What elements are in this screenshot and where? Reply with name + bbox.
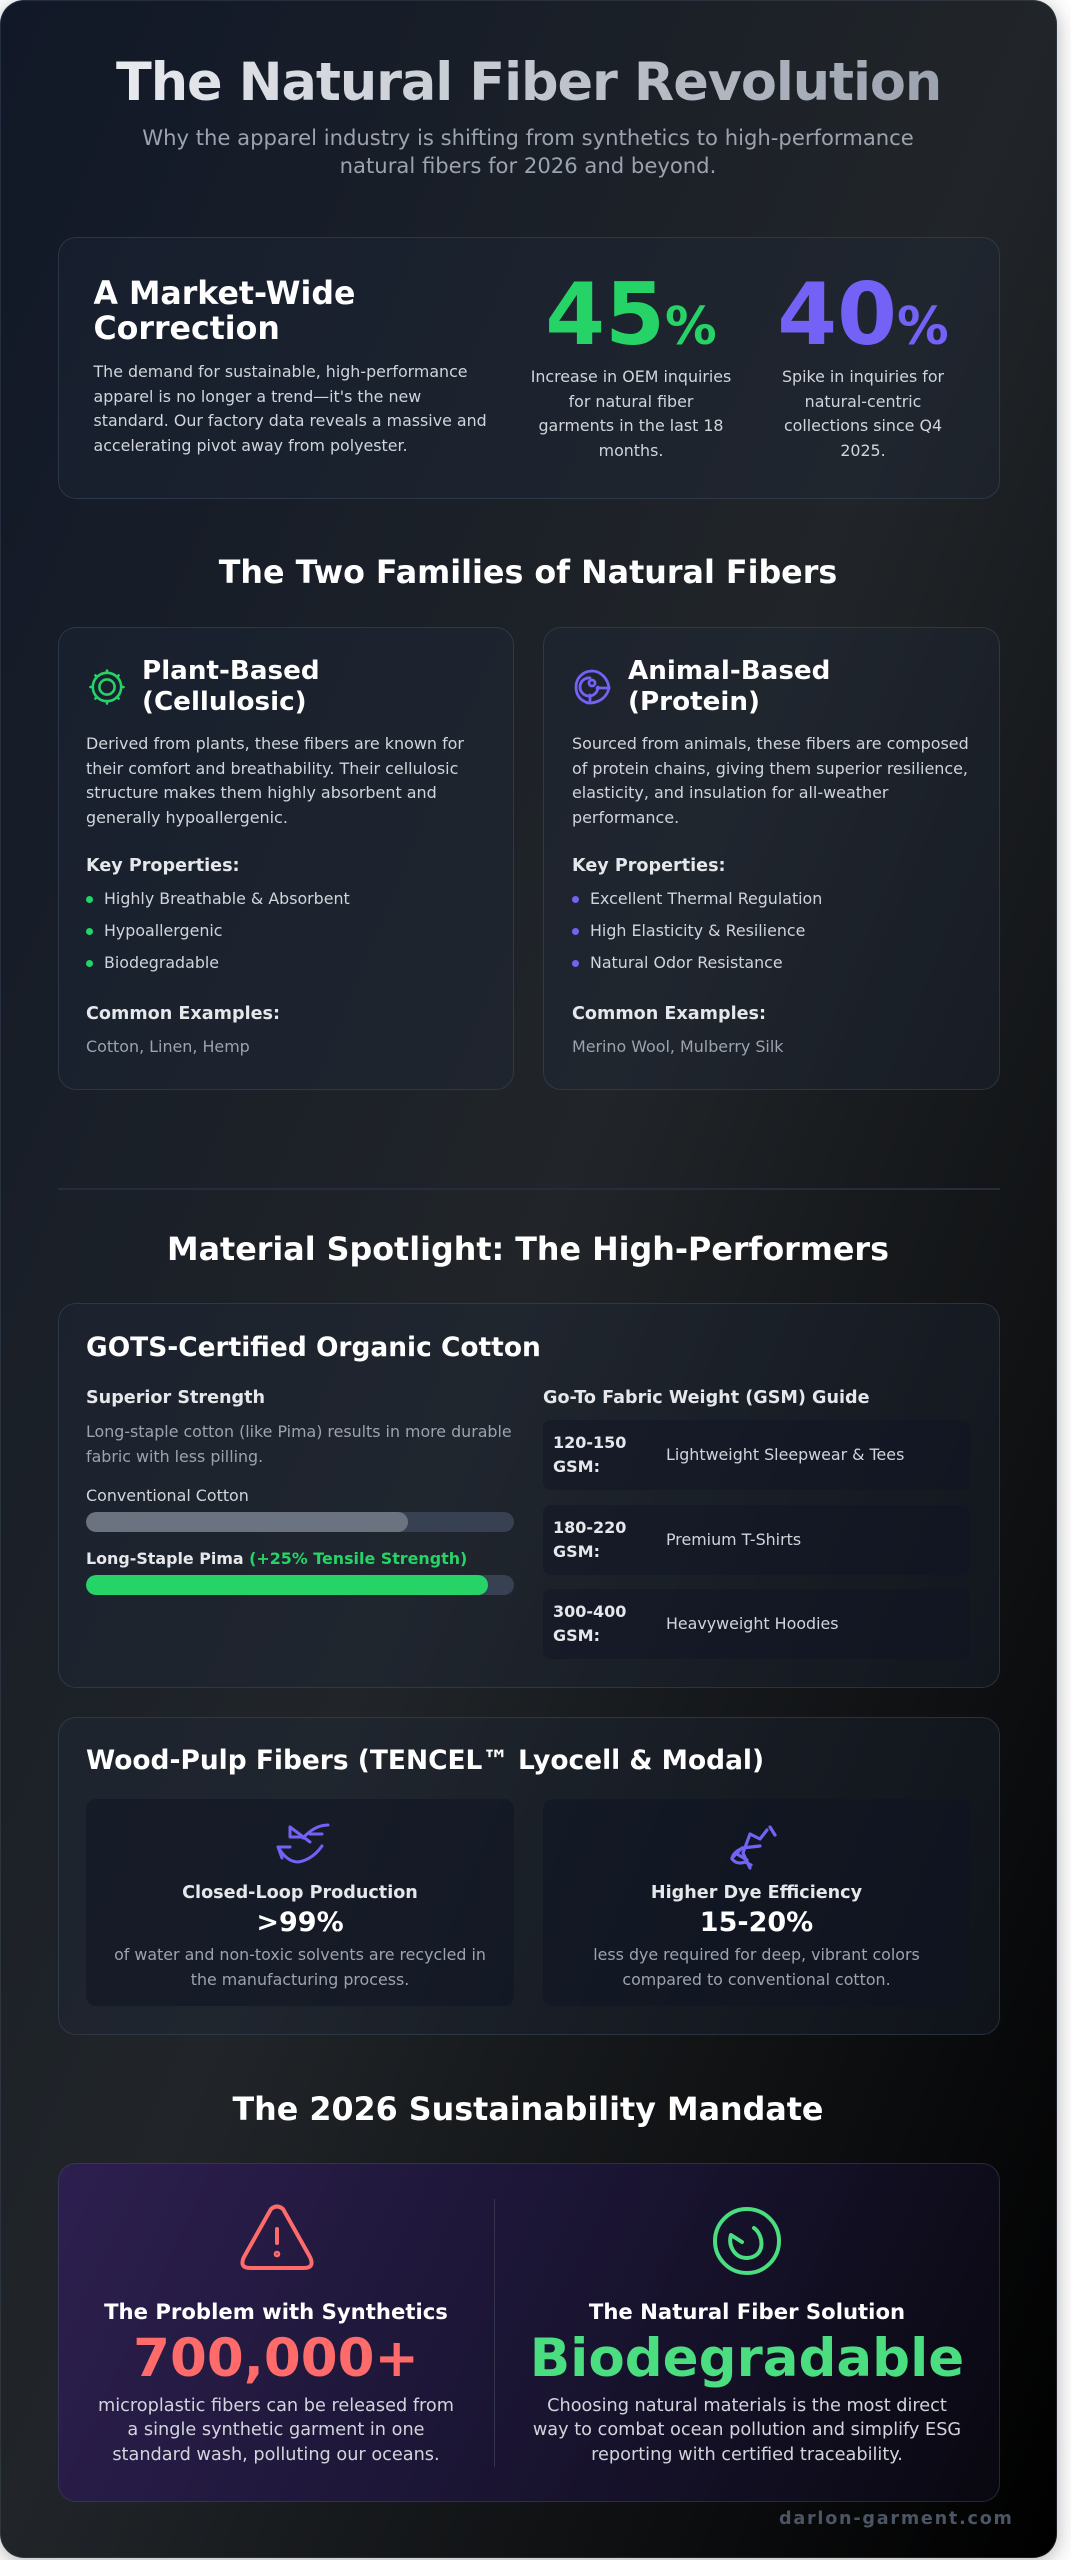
stat label (782, 367, 944, 460)
stat label: for natural fiber (569, 392, 693, 411)
box description: of water and non-toxic solvents are recycled in (114, 1945, 486, 1964)
column text (98, 2396, 454, 2465)
box description: less dye required for deep, vibrant colors (593, 1945, 920, 1964)
list text: Highly Breathable & Absorbent (104, 889, 350, 908)
intro text: apparel is no longer a trend—it's the new (94, 387, 421, 406)
bullet (572, 928, 579, 935)
long-staple pima label: Long-Staple Pima (+25% Tensile Strength) (86, 1549, 467, 1568)
subtitle: natural fibers for 2026 and beyond. (340, 153, 716, 178)
bullet (572, 960, 579, 967)
gsm range: GSM: (553, 1457, 600, 1476)
column title: The Problem with Synthetics (104, 2299, 448, 2324)
heading: sustainability mandate: The 2026 Sustainability Mandate (233, 2092, 823, 2128)
box description (114, 1945, 486, 1989)
superior strength heading: Superior Strength (86, 1388, 265, 1408)
gsm range: GSM: (553, 1542, 600, 1561)
stat label (531, 367, 731, 460)
common examples: Merino Wool, Mulberry Silk (572, 1037, 783, 1056)
gsm range (553, 1518, 626, 1561)
intro text: The demand for sustainable, high-performance (94, 362, 468, 381)
bullet (572, 896, 579, 903)
conventional cotton label: Conventional Cotton (86, 1486, 249, 1504)
heading: Animal-Based (628, 656, 830, 686)
superior strength text: fabric with less pilling. (86, 1447, 263, 1466)
panel: plant-based (58, 626, 514, 1090)
description (572, 734, 969, 827)
column: natural fiber solution (530, 2207, 964, 2465)
heading (142, 656, 320, 717)
bar fill (86, 1575, 488, 1595)
list text: Natural Odor Resistance (590, 953, 783, 972)
heading: Wood-Pulp Fibers (TENCEL™ Lyocell & Modal) (86, 1745, 764, 1776)
gsm guide heading: Go-To Fabric Weight (GSM) Guide (543, 1388, 870, 1408)
gsm range (553, 1432, 626, 1476)
stat label: months. (599, 441, 663, 460)
big number: 700,000+ (133, 2328, 419, 2388)
common examples heading: Common Examples: (86, 1004, 280, 1024)
column text: way to combat ocean pollution and simplify ESG (533, 2420, 961, 2440)
panel: market-wide correction (58, 237, 1000, 499)
gsm range: 180-220 (553, 1518, 626, 1536)
heading: (Protein) (628, 687, 760, 717)
gsm range: 120-150 (553, 1432, 626, 1452)
superior strength text (86, 1422, 512, 1466)
stat: 40 percent (777, 265, 949, 460)
box value: 15-20% (700, 1907, 813, 1938)
header (116, 52, 941, 178)
column: problem with synthetics (98, 2204, 454, 2465)
key properties heading: Key Properties: (86, 856, 240, 876)
heading: material spotlight: Material Spotlight: The High-Performers (167, 1232, 889, 1268)
box description: the manufacturing process. (191, 1970, 409, 1989)
icon: recycle loop (276, 1824, 330, 1864)
list text (104, 889, 350, 972)
description: structure makes them highly absorbent and (86, 783, 437, 802)
superior strength text: Long-staple cotton (like Pima) results in more durable (86, 1422, 512, 1441)
icon: biodegradable circle (713, 2207, 781, 2275)
gsm range (553, 1602, 626, 1645)
stat label: garments in the last 18 (538, 416, 724, 435)
icon: warning triangle (240, 2204, 314, 2270)
box description: compared to conventional cotton. (622, 1970, 891, 1989)
title: The Natural Fiber Revolution (116, 52, 941, 113)
icon: plant cell (89, 669, 125, 705)
stat value: 45% (545, 265, 717, 365)
key properties list (572, 889, 822, 972)
description: generally hypoallergenic. (86, 808, 288, 827)
icon: animal protein (574, 670, 610, 704)
column text: Choosing natural materials is the most direct (547, 2396, 947, 2416)
column text: microplastic fibers can be released from (98, 2396, 454, 2416)
heading: Plant-Based (142, 656, 320, 686)
intro text: accelerating pivot away from polyester. (94, 436, 408, 455)
list text: Excellent Thermal Regulation (590, 889, 822, 908)
gsm use: Lightweight Sleepwear & Tees (666, 1445, 904, 1464)
subtitle: Why the apparel industry is shifting from synthetics to high-performance (142, 125, 914, 150)
description: performance. (572, 808, 679, 827)
panel: wood-pulp fibers (58, 1717, 1000, 2035)
stat value: 40% (777, 265, 949, 365)
stat label: collections since Q4 (784, 416, 942, 435)
gsm range: 300-400 (553, 1602, 626, 1620)
stat box: dye efficiency (543, 1799, 970, 2006)
gsm use: Premium T-Shirts (666, 1530, 801, 1549)
common examples heading: Common Examples: (572, 1004, 766, 1024)
gsm use: Heavyweight Hoodies (666, 1614, 839, 1633)
heading (94, 276, 355, 347)
heading: (Cellulosic) (142, 687, 307, 717)
gsm row 1 (543, 1420, 970, 1490)
stat label: 2025. (840, 441, 886, 460)
bar fill (86, 1512, 408, 1532)
big word: Biodegradable (530, 2328, 964, 2388)
subtitle (142, 125, 914, 178)
box title: Closed-Loop Production (182, 1883, 418, 1903)
heading (628, 656, 830, 717)
heading: Correction (94, 311, 280, 347)
column text: standard wash, polluting our oceans. (112, 2445, 440, 2465)
description: their comfort and breathability. Their cellulosic (86, 759, 458, 778)
bullet (86, 960, 93, 967)
heading: GOTS-Certified Organic Cotton (86, 1332, 541, 1363)
list text (590, 889, 822, 972)
stat label: natural-centric (805, 392, 921, 411)
bar: long-staple pima (86, 1575, 514, 1595)
column text: a single synthetic garment in one (127, 2420, 425, 2440)
bullet (86, 896, 93, 903)
description: Derived from plants, these fibers are known for (86, 734, 464, 753)
description: Sourced from animals, these fibers are composed (572, 734, 969, 753)
description: of protein chains, giving them superior resilience, (572, 759, 968, 778)
key properties list (86, 889, 350, 972)
icon: dye brush (730, 1825, 777, 1870)
gsm row 3 (543, 1589, 970, 1659)
description (86, 734, 464, 827)
intro text: standard. Our factory data reveals a massive and (94, 411, 487, 430)
box title: Higher Dye Efficiency (651, 1883, 862, 1903)
column text: reporting with certified traceability. (591, 2445, 903, 2465)
key properties heading: Key Properties: (572, 856, 726, 876)
bullet (86, 928, 93, 935)
stat: 45 percent (531, 265, 731, 460)
gsm range: GSM: (553, 1626, 600, 1645)
footer url: darlon-garment.com (779, 2509, 1014, 2529)
panel: sustainability mandate (58, 2163, 1000, 2502)
stat box: closed-loop (86, 1799, 514, 2006)
panel: organic cotton (58, 1303, 1000, 1688)
stat label: Increase in OEM inquiries (531, 367, 731, 386)
bar: conventional cotton (86, 1512, 514, 1532)
box value: >99% (256, 1907, 344, 1938)
list text: Biodegradable (104, 953, 219, 972)
column title: The Natural Fiber Solution (589, 2299, 905, 2324)
gsm row 2 (543, 1505, 970, 1575)
heading: two families: The Two Families of Natural Fibers (219, 555, 837, 591)
list text: High Elasticity & Resilience (590, 921, 805, 940)
list text: Hypoallergenic (104, 921, 222, 940)
heading: A Market-Wide (94, 276, 355, 312)
common examples: Cotton, Linen, Hemp (86, 1037, 250, 1056)
stat label: Spike in inquiries for (782, 367, 944, 386)
description: elasticity, and insulation for all-weather (572, 783, 888, 802)
box description (593, 1945, 920, 1989)
panel: animal-based (543, 626, 1000, 1090)
intro text (93, 362, 487, 455)
column text (533, 2396, 961, 2465)
